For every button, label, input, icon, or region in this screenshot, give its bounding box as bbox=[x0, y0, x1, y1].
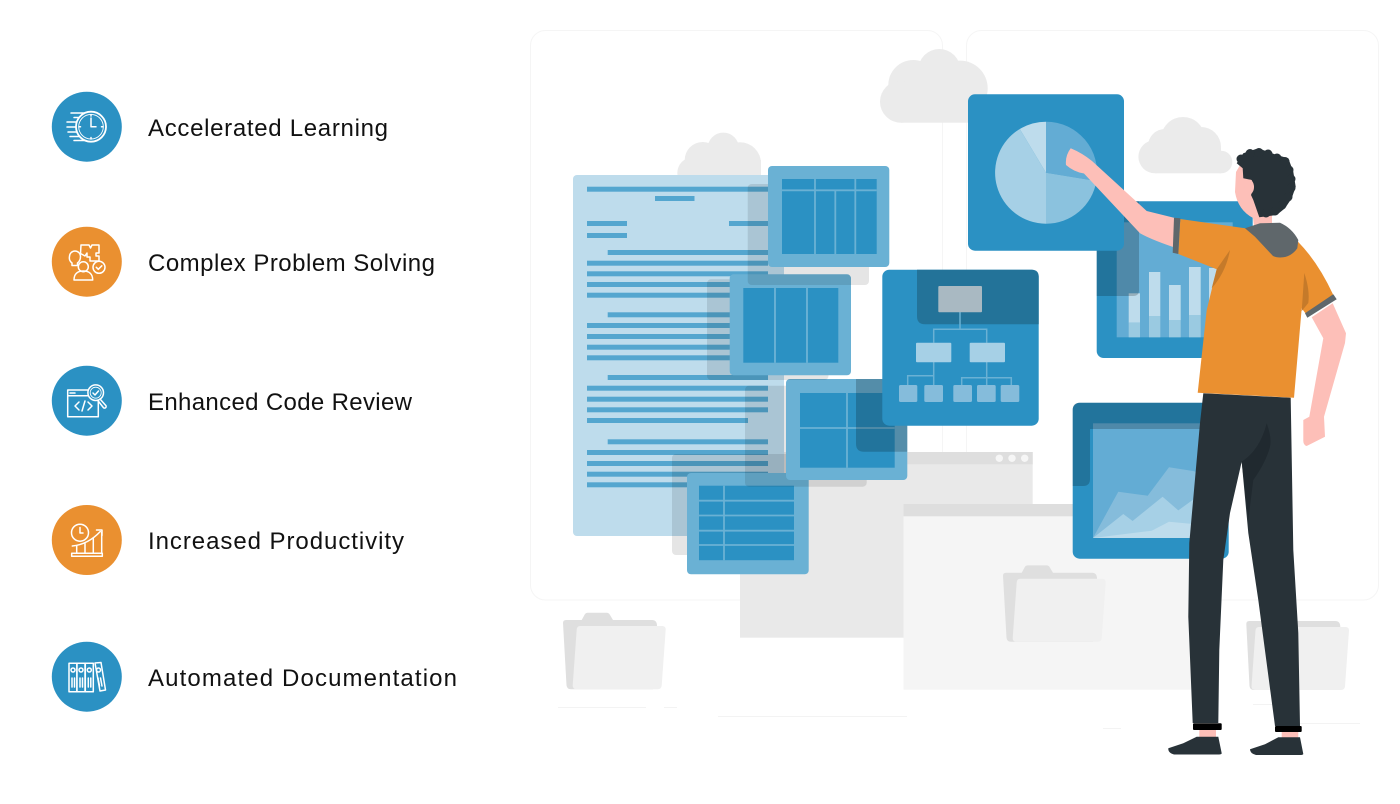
grey browser window: back bbox=[740, 452, 1033, 638]
folder: centre bbox=[1003, 565, 1106, 642]
person reaching toward the charts bbox=[1066, 148, 1346, 755]
folder: right bbox=[1246, 614, 1349, 690]
table tile: four quadrants bbox=[745, 379, 907, 487]
shirt bbox=[1178, 219, 1333, 398]
back arm bbox=[1303, 303, 1346, 446]
list item: Complex Problem Solving bbox=[52, 227, 435, 297]
area chart tile bbox=[1073, 403, 1229, 559]
ground lines bbox=[558, 704, 1360, 728]
cloud: behind document bbox=[677, 133, 761, 189]
cloud: top centre bbox=[880, 49, 988, 123]
cloud: top right bbox=[1138, 117, 1232, 173]
icon: person with bulb and puzzle bbox=[52, 227, 122, 297]
sleeve hems bbox=[1173, 218, 1337, 318]
list item: Enhanced Code Review bbox=[52, 366, 413, 436]
table tile: top with header bbox=[748, 166, 889, 285]
icon: clock and growth chart bbox=[52, 505, 122, 575]
icon: row of binders bbox=[52, 642, 122, 712]
label: Automated Documentation bbox=[148, 665, 457, 692]
third level nodes bbox=[899, 385, 1019, 402]
icon: code window with magnifier bbox=[52, 366, 122, 436]
org chart tile bbox=[882, 270, 1039, 426]
ankles bbox=[1199, 730, 1298, 738]
icon: fast clock bbox=[52, 92, 122, 162]
hair bbox=[1236, 148, 1296, 218]
bar chart tile bbox=[1097, 201, 1253, 358]
bars bbox=[1129, 267, 1221, 337]
shirt folds bbox=[1212, 250, 1309, 311]
second level nodes bbox=[916, 343, 1005, 362]
root node bbox=[938, 286, 982, 312]
grey browser window: front bbox=[904, 504, 1195, 690]
label: Complex Problem Solving bbox=[148, 250, 435, 277]
list item: Automated Documentation bbox=[52, 642, 457, 712]
list item: Accelerated Learning bbox=[52, 92, 388, 162]
table tile: bottom bbox=[672, 454, 809, 574]
raised arm bbox=[1066, 148, 1176, 248]
folder: left bbox=[563, 613, 666, 689]
pie chart bbox=[995, 122, 1097, 224]
document text lines bbox=[587, 187, 768, 487]
document page bbox=[573, 175, 784, 536]
table tile: three columns bbox=[707, 274, 851, 380]
panel: right background card bbox=[966, 30, 1378, 600]
ear bbox=[1244, 180, 1254, 194]
neck and face bbox=[1235, 160, 1272, 226]
label: Increased Productivity bbox=[148, 528, 404, 555]
list item: Increased Productivity bbox=[52, 505, 404, 575]
pants fold bbox=[1242, 423, 1271, 520]
hood bbox=[1245, 223, 1298, 257]
panel: left background card bbox=[530, 30, 942, 600]
pie chart tile bbox=[968, 94, 1124, 251]
cuffs bbox=[1193, 723, 1302, 732]
shoes bbox=[1168, 737, 1303, 755]
label: Enhanced Code Review bbox=[148, 389, 413, 416]
label: Accelerated Learning bbox=[148, 115, 388, 142]
pants bbox=[1188, 393, 1300, 726]
connectors bbox=[908, 312, 1011, 385]
